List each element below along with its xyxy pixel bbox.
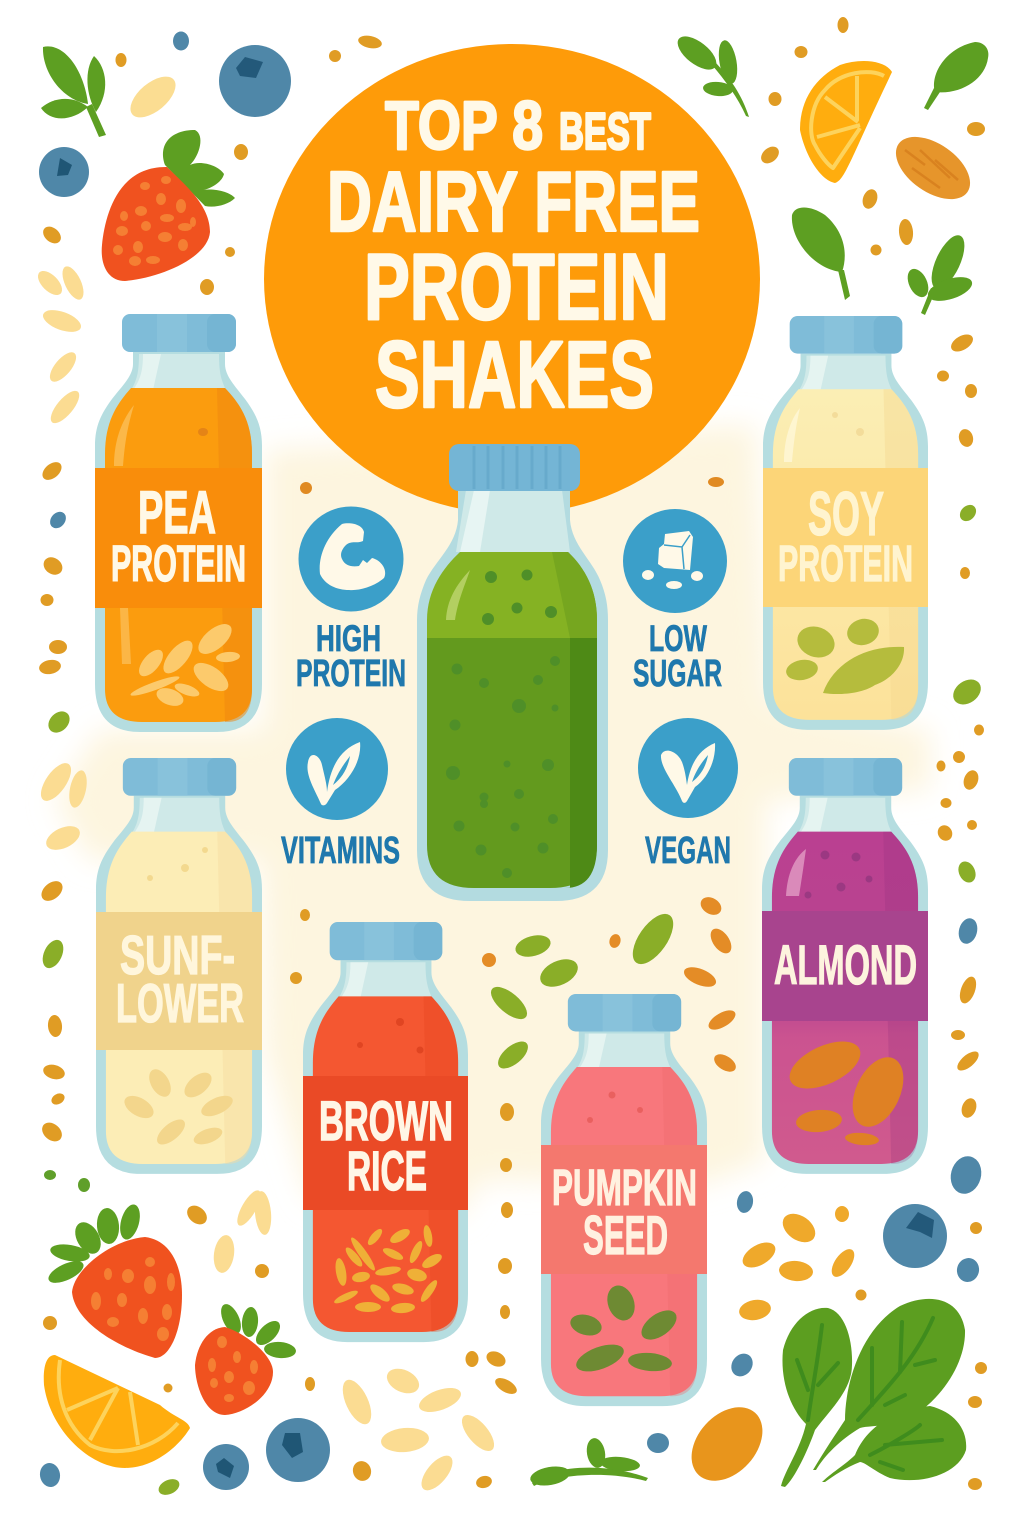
title: PROTEIN — [364, 234, 669, 339]
bottle: green centre — [417, 444, 608, 901]
cream glow — [55, 425, 930, 1215]
icon: orange slice top right — [800, 61, 892, 183]
icon: leaf sprig right — [904, 231, 975, 315]
icon: strawberry bottom left large — [45, 1202, 182, 1358]
oats scattered — [34, 263, 500, 1496]
label text — [319, 1089, 453, 1202]
icon: strawberry top — [102, 130, 235, 281]
label text: LOWER — [116, 972, 244, 1034]
title — [327, 87, 700, 428]
icon: almond bottom right — [677, 1393, 777, 1495]
icon: blueberry bottom left large — [266, 1418, 330, 1482]
bottle: almond — [762, 758, 928, 1174]
label: low sugar: LOW — [649, 618, 707, 659]
icon: blueberry bottom left small — [203, 1444, 249, 1490]
pumpkin leaves — [568, 1282, 682, 1377]
bottle: soy protein — [763, 316, 928, 730]
label text — [552, 1159, 697, 1266]
label: low sugar: SUGAR — [633, 653, 722, 695]
bottle: pumpkin seed — [541, 994, 707, 1406]
label text — [111, 479, 246, 592]
icon: spinach leaf top right — [924, 42, 988, 110]
label text — [778, 480, 913, 592]
label: low sugar — [633, 618, 722, 695]
icon: orange slice bottom left — [44, 1355, 190, 1468]
title: SHAKES — [375, 322, 654, 428]
icon: blueberry small top — [39, 147, 89, 197]
label: vegan: VEGAN — [645, 830, 731, 872]
icon: spinach leaf right — [792, 208, 850, 300]
label text — [116, 924, 244, 1034]
icon: high protein — [298, 506, 404, 612]
icon: blueberry large top — [219, 45, 291, 117]
oat top left — [123, 69, 183, 125]
icon: low sugar — [623, 509, 727, 613]
bottle: brown rice — [303, 922, 468, 1342]
icon: sprig bottom centre — [529, 1437, 648, 1488]
scattered green seeds — [39, 502, 986, 1498]
rice grains — [333, 1224, 444, 1314]
almonds — [783, 1032, 914, 1146]
scattered gold seeds bottom right — [738, 1206, 859, 1323]
seeds — [121, 1066, 236, 1149]
label text: SEED — [583, 1204, 668, 1266]
label text: PROTEIN — [778, 535, 913, 592]
icon: blueberry bottom right — [883, 1204, 947, 1268]
icon: leaf sprig top right — [672, 30, 749, 117]
title: DAIRY FREE — [327, 155, 700, 250]
label: high protein — [296, 618, 406, 695]
bottle: pea protein — [95, 314, 262, 732]
icon: vitamins — [286, 718, 388, 820]
label: high protein: PROTEIN — [296, 653, 406, 695]
icon: almond top right — [885, 124, 981, 212]
label text: PROTEIN — [111, 535, 246, 592]
label text: SUNF- — [120, 924, 235, 986]
label text: SOY — [808, 480, 884, 549]
icon: strawberry bottom left small — [195, 1301, 297, 1415]
label text: PEA — [138, 479, 216, 546]
almonds centre right — [482, 894, 739, 1075]
icon: spinach bottom right — [781, 1299, 966, 1487]
oats — [129, 618, 240, 709]
icon: leaf sprig top left — [41, 46, 106, 137]
label text: PUMPKIN — [552, 1159, 697, 1216]
title: TOP 8 — [385, 87, 543, 164]
title: BEST — [559, 103, 651, 161]
label text: RICE — [347, 1139, 427, 1202]
bottle: sunflower — [96, 758, 262, 1174]
label text: BROWN — [319, 1089, 453, 1152]
label: vitamins: VITAMINS — [281, 830, 400, 872]
icon: vegan — [638, 718, 738, 818]
title badge — [264, 44, 760, 514]
label: high protein: HIGH — [316, 618, 381, 659]
soybeans — [785, 615, 904, 694]
label text: ALMOND — [774, 933, 917, 996]
